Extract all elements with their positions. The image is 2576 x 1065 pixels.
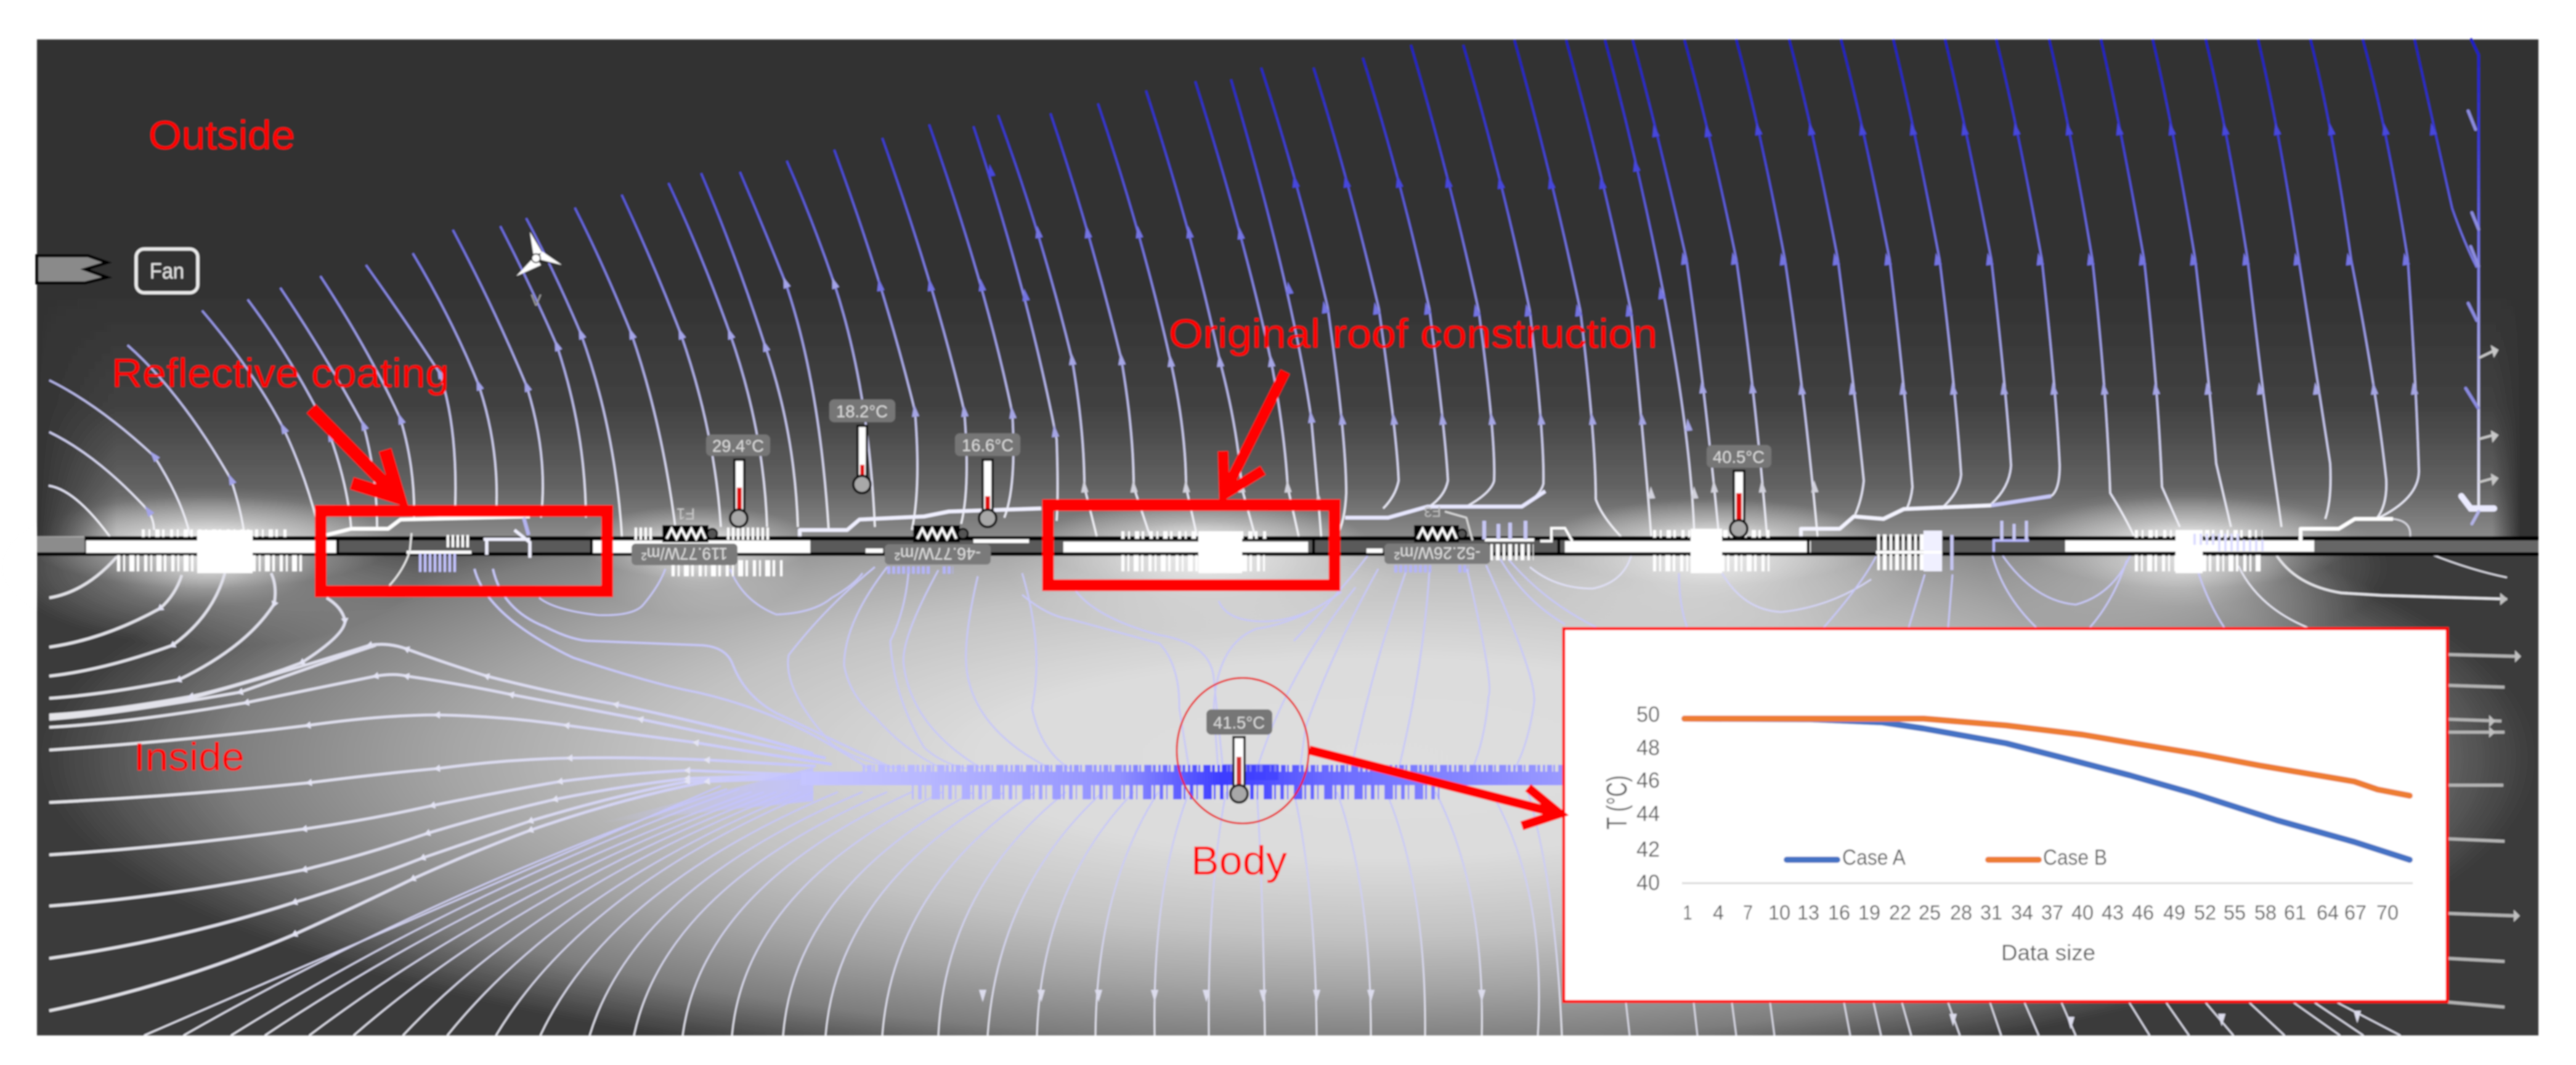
highlight box: reflective coating (320, 511, 607, 592)
x axis labels: 13 (1797, 901, 1819, 924)
x axis labels: 7 (1743, 901, 1753, 924)
heat flux plate: -52.26 W/m2: -52.26W/m² (1394, 544, 1481, 563)
y axis labels: 42 (1636, 838, 1660, 862)
streamlines: outside air rising (49, 39, 2477, 542)
thermometer: 18.2 C: 18.2°C (836, 402, 888, 421)
x axis labels: 31 (1980, 901, 2002, 924)
flux sensor F3 (1414, 503, 1466, 542)
thermometer: 40.5 C (1707, 445, 1771, 537)
y axis labels: 44 (1636, 802, 1660, 826)
thermometer: 16.6 C: 16.6°C (962, 436, 1014, 455)
arrowheads: top row (991, 129, 2432, 183)
x axis labels: 64 (2317, 901, 2339, 924)
heat flux clusters on the roof (117, 528, 2267, 586)
streamlines: air from the floor converging on the body (144, 786, 2400, 1035)
icon: propeller: V (530, 291, 542, 309)
roof air gap lines above the covers (327, 491, 2393, 570)
label: original roof construction: Original roof construction (1169, 311, 1657, 356)
arrow: original roof construction (1223, 372, 1285, 494)
x axis labels: 70 (2376, 901, 2399, 924)
thermometer: 16.6 C (955, 433, 1020, 527)
label: body: Body (1191, 838, 1287, 883)
label: outside: Outside (148, 112, 295, 158)
heat flux plate: 119.77 W/m2: 119.77W/m² (641, 544, 728, 563)
fan label (136, 249, 198, 293)
line: case B (1684, 719, 2410, 796)
y axis labels: 50 (1636, 703, 1660, 727)
fan label: Fan (150, 258, 184, 284)
flux sensor F3: F3 (1424, 503, 1441, 520)
thermometer: 29.4 C: 29.4°C (712, 436, 764, 455)
arrowheads: second row (880, 232, 2405, 311)
arrowheads: downward flow near the floor (979, 990, 2361, 1029)
x axis labels: 40 (2071, 901, 2094, 924)
x axis labels: 16 (1828, 901, 1850, 924)
flux sensor 2 (913, 525, 968, 542)
thermometer: 29.4 C (706, 435, 770, 527)
heat flux plate: -46.77 W/m2: -46.77W/m² (895, 544, 981, 563)
streamlines: right wall with side arrows (2461, 39, 2498, 524)
streamlines: inside air left of the body (49, 557, 835, 1011)
legend: case A: Case A (1842, 846, 1906, 870)
y axis labels: 40 (1636, 871, 1660, 895)
body heat source band (599, 764, 1565, 823)
x axis title: Data size (2001, 940, 2095, 965)
label: inside: Inside (134, 735, 245, 779)
highlight box: original roof construction (1048, 505, 1335, 586)
callout ring: body (1177, 678, 1309, 823)
line: case A (1684, 719, 2410, 860)
x axis labels: 49 (2163, 901, 2185, 924)
x axis labels: 25 (1919, 901, 1941, 924)
x axis labels: 4 (1713, 901, 1724, 924)
x axis labels: 28 (1950, 901, 1972, 924)
thermometer: 18.2 C (829, 399, 895, 493)
x axis labels: 61 (2284, 901, 2306, 924)
fan inlet icon (37, 256, 107, 283)
x axis labels (1683, 901, 2399, 924)
y axis labels (1636, 703, 1660, 895)
x axis labels: 22 (1889, 901, 1911, 924)
streamlines: outflow to the right of the chart (2448, 593, 2521, 1007)
x axis labels: 55 (2224, 901, 2246, 924)
x axis labels: 67 (2344, 901, 2367, 924)
thermometer: 41.5 C at the body: 41.5°C (1213, 713, 1265, 732)
roof section (37, 536, 2538, 556)
thermometer: 40.5 C: 40.5°C (1713, 447, 1765, 467)
legend: case B: Case B (2043, 846, 2107, 870)
x axis labels: 52 (2194, 901, 2216, 924)
arrowheads: fourth row (1084, 487, 1814, 499)
x axis labels: 34 (2011, 901, 2033, 924)
x axis labels: 10 (1768, 901, 1790, 924)
x axis labels: 37 (2041, 901, 2063, 924)
structural posts (338, 541, 1808, 553)
label: reflective coating: Reflective coating (112, 350, 449, 396)
y axis labels: 48 (1636, 736, 1660, 760)
x axis labels: 19 (1858, 901, 1880, 924)
chart baseline (1682, 883, 2413, 884)
y axis title: T (°C) (1601, 775, 1633, 830)
flux sensor F1 (662, 505, 717, 542)
arrowheads: third row (915, 359, 2414, 431)
x axis labels: 43 (2102, 901, 2124, 924)
arrow: reflective coating (311, 409, 399, 498)
flux sensor F1: F1 (677, 505, 695, 523)
x axis labels: 1 (1683, 901, 1692, 924)
icon: propeller (514, 231, 564, 309)
x axis labels: 58 (2254, 901, 2277, 924)
white insulation strips (86, 539, 2314, 553)
streamlines: air from the roof descending to the body (474, 519, 2507, 780)
x axis labels: 46 (2132, 901, 2154, 924)
y axis labels: 46 (1636, 769, 1660, 793)
arrow: body to chart (1309, 750, 1559, 826)
chart panel (1564, 629, 2447, 1002)
thermometer: 41.5 C at the body (1206, 709, 1272, 802)
